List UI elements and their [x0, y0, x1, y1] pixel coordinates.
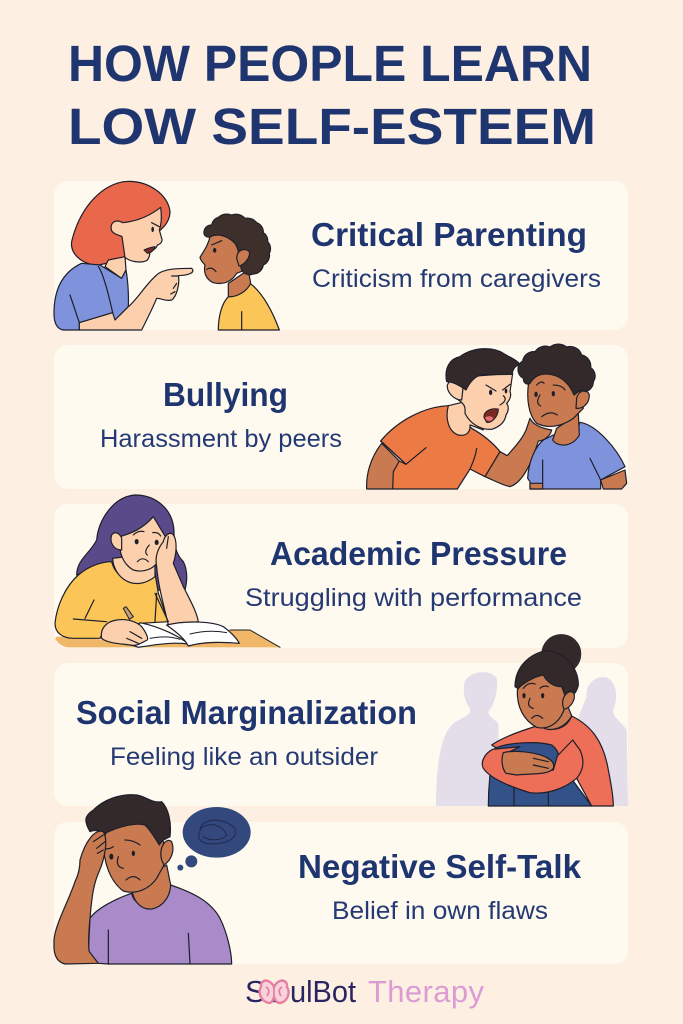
- illustration: man with thought bubble: [54, 795, 251, 964]
- folded arms: [482, 740, 583, 793]
- arm: [79, 268, 193, 330]
- logo: SoulBot Therapy: S: [245, 974, 266, 1009]
- boy's shirt: [528, 422, 625, 489]
- face: [120, 517, 172, 571]
- logo: SoulBot Therapy: o: [266, 974, 283, 1009]
- title: [68, 35, 596, 155]
- text: critical parenting description: Criticism from caregivers: [312, 265, 601, 293]
- panel: bullying: [54, 344, 628, 489]
- face: [517, 675, 567, 728]
- silhouette left: [436, 672, 500, 806]
- silhouette right: [573, 677, 628, 806]
- text: academic pressure description: Struggling with performance: [245, 584, 582, 612]
- illustration: girl studying: [55, 495, 280, 647]
- neck: [540, 703, 572, 730]
- face: [111, 207, 162, 262]
- logo: SoulBot Therapy: Therapy: [368, 974, 484, 1009]
- desk: [55, 630, 280, 647]
- boy's neck and face: [553, 413, 579, 445]
- face: [103, 815, 165, 892]
- bully's arm: [485, 418, 552, 487]
- bun and hair: [542, 635, 581, 673]
- sweater body: [492, 716, 613, 806]
- panel: social marginalization: [54, 635, 628, 806]
- arm: [54, 831, 106, 964]
- bully's back arm: [367, 443, 400, 489]
- text: bullying description: Harassment by peers: [100, 425, 342, 453]
- shirt: [54, 263, 128, 330]
- shirt: [88, 885, 232, 964]
- woman's hair back: [72, 181, 170, 265]
- logo: SoulBot Therapy: [245, 974, 484, 1009]
- writing hand: [101, 620, 148, 645]
- heading: social marginalization: Social Marginalization: [76, 694, 417, 731]
- panel: academic pressure: [54, 495, 628, 648]
- icon: brain: [260, 981, 289, 1003]
- text: negative self-talk description: Belief in own flaws: [332, 897, 548, 925]
- illustration: bully shouting at boy: [367, 344, 627, 489]
- panel: critical parenting: [54, 181, 628, 330]
- sweater: [55, 562, 168, 638]
- neck: [113, 553, 155, 584]
- boy's face: [200, 230, 250, 284]
- jeans: [488, 743, 592, 806]
- title: LOW SELF-ESTEEM: [68, 98, 596, 155]
- bully's shirt: [381, 406, 500, 489]
- illustration: parent pointing at child: [54, 181, 279, 330]
- logo: SoulBot Therapy: ulBot: [290, 974, 356, 1009]
- hand: [502, 751, 554, 775]
- heading: negative self-talk: Negative Self-Talk: [298, 848, 582, 885]
- thought bubble: [183, 807, 251, 858]
- boy's shirt: [218, 283, 279, 330]
- panel: negative self-talk: [54, 795, 628, 964]
- supporting arm and hand: [156, 533, 198, 625]
- text: social marginalization description: Feeling like an outsider: [110, 743, 378, 771]
- hair: [77, 495, 187, 590]
- illustration: excluded girl with silhouettes: [436, 635, 628, 806]
- heading: academic pressure: Academic Pressure: [270, 535, 567, 572]
- bully's neck and face: [447, 402, 483, 435]
- pencil: [123, 607, 133, 619]
- heading: critical parenting: Critical Parenting: [311, 216, 587, 253]
- book: [127, 623, 188, 647]
- heading: bullying: Bullying: [163, 376, 288, 413]
- title: HOW PEOPLE LEARN: [68, 35, 592, 92]
- neck: [132, 865, 171, 909]
